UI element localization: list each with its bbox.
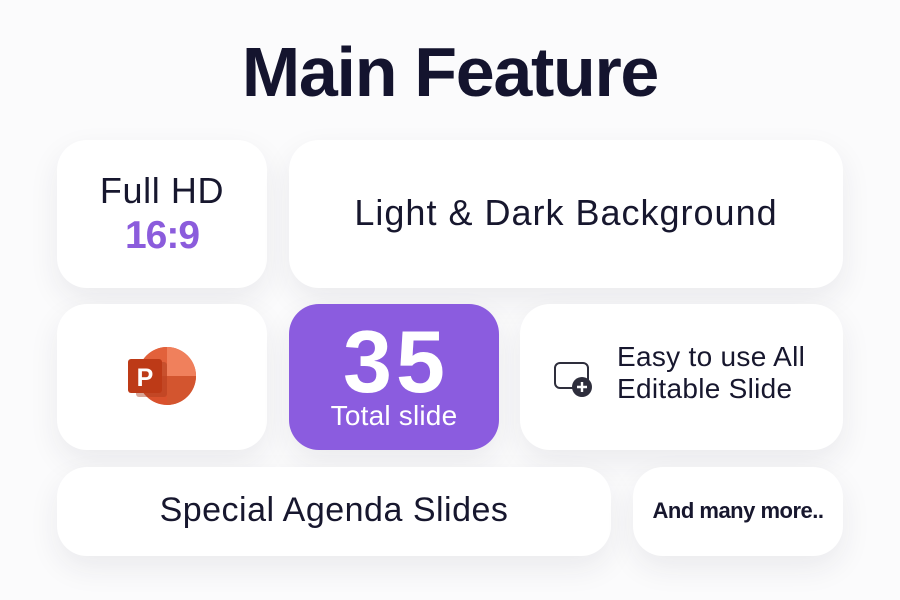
text: light and dark background: Light & Dark Background [354, 192, 778, 233]
icon: powerpoint: P [137, 364, 153, 392]
text: special agenda slides: Special Agenda Slides [160, 491, 508, 529]
text: full hd: Full HD [100, 170, 224, 211]
text: total slide: Total slide [331, 400, 457, 431]
text: easy to use [617, 341, 805, 404]
panel: more [633, 467, 843, 556]
panel: powerpoint [57, 304, 267, 450]
panel: background [289, 140, 843, 288]
text: easy to use: Easy to use All [617, 341, 805, 372]
title: Main Feature [242, 33, 658, 111]
icon: powerpoint [128, 347, 196, 405]
panel: agenda [57, 467, 611, 556]
panel: full hd [57, 140, 267, 288]
text: easy to use: Editable Slide [617, 373, 792, 404]
panel: total slides [289, 304, 499, 450]
panel: editable [520, 304, 843, 450]
number: 35: 35 [343, 312, 449, 411]
icon: add slide [554, 362, 592, 397]
text: and many more: And many more.. [652, 498, 823, 523]
text: 16:9: 16:9 [125, 214, 199, 257]
